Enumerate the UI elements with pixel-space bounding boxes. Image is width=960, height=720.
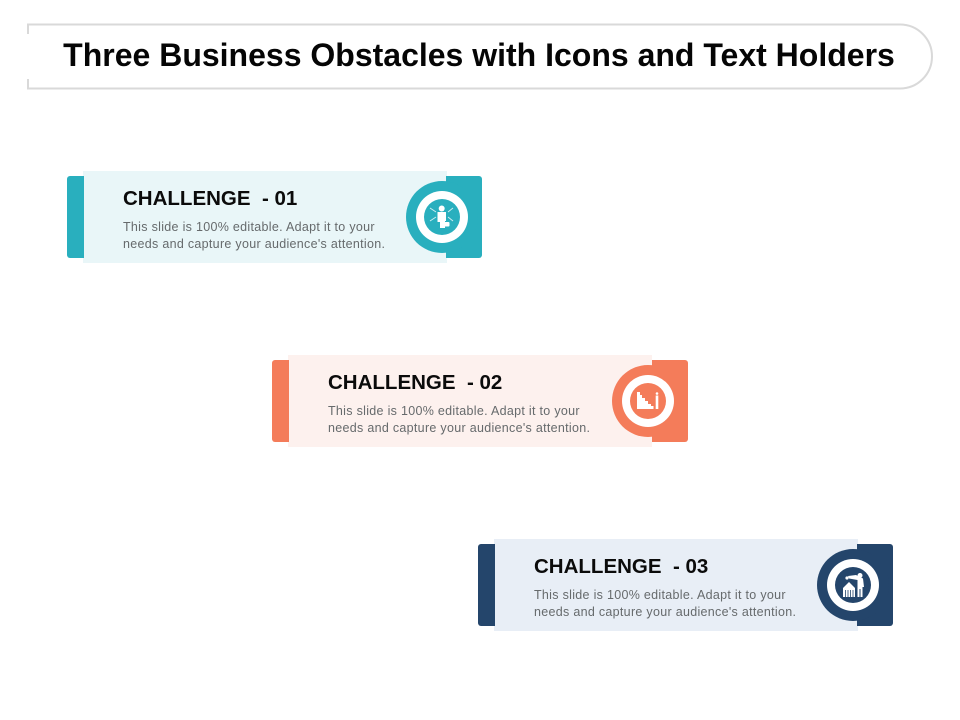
heading: challenge 02: CHALLENGE - 02	[328, 371, 502, 394]
title: Three Business Obstacles with Icons and Text Holders	[63, 37, 895, 73]
text: challenge 01: needs and capture your audience's attention.	[123, 236, 385, 250]
heading: challenge 03: CHALLENGE - 03	[534, 555, 708, 578]
text: challenge 01: This slide is 100% editable. Adapt it to your	[123, 220, 375, 234]
text: challenge 02	[328, 404, 590, 434]
panel: challenge 03	[478, 539, 893, 631]
text: challenge 03: This slide is 100% editable. Adapt it to your	[534, 588, 786, 602]
text: challenge 02: needs and capture your audience's attention.	[328, 420, 590, 434]
heading: challenge 01: CHALLENGE - 01	[123, 187, 297, 210]
panel: challenge 02	[272, 355, 688, 447]
icon: person with cake	[817, 549, 879, 621]
text: challenge 02: This slide is 100% editable. Adapt it to your	[328, 404, 580, 418]
icon: person with arrows	[406, 181, 468, 253]
text: challenge 01	[123, 220, 385, 250]
text: challenge 03	[534, 588, 796, 618]
panel: challenge 01	[67, 171, 482, 263]
icon: stairs and person	[612, 365, 674, 437]
text: challenge 03: needs and capture your audience's attention.	[534, 604, 796, 618]
title banner	[27, 24, 933, 90]
